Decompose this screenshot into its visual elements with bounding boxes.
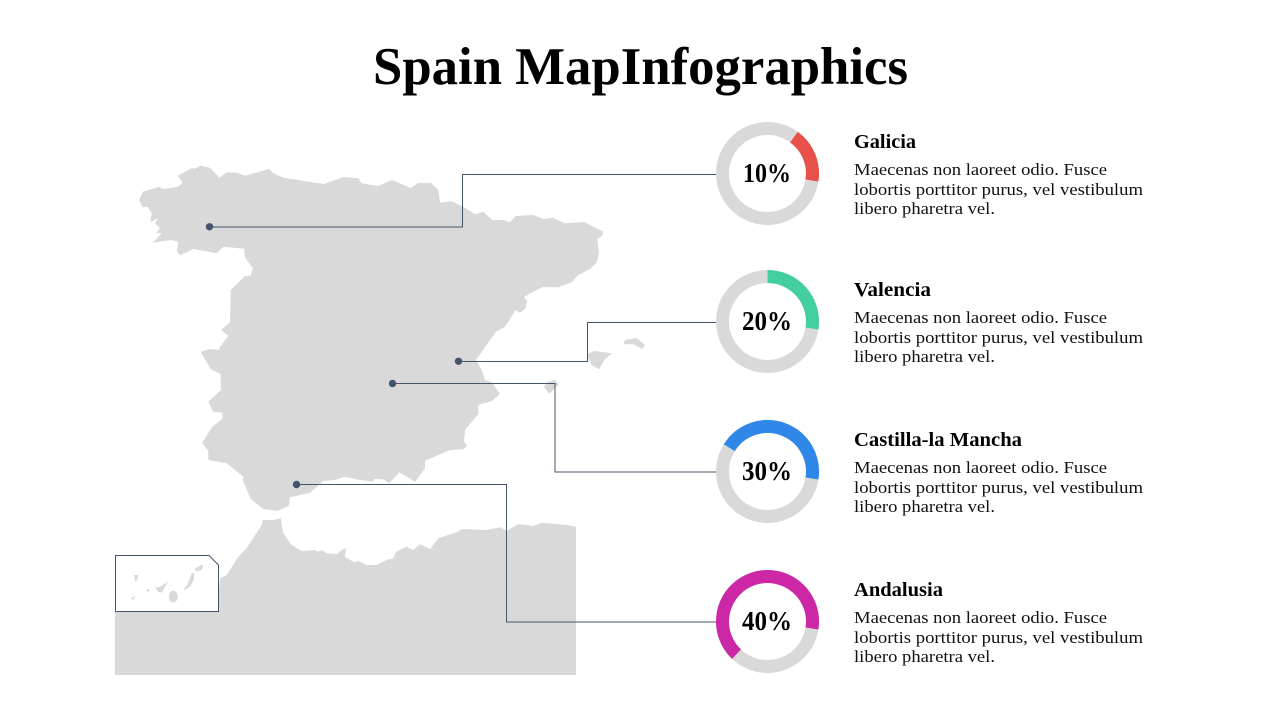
text: Andalusia: Maecenas non laoreet odio. Fusce <box>854 608 1107 627</box>
text: Andalusia: libero pharetra vel. <box>854 647 995 666</box>
Balearic Islands <box>544 338 645 394</box>
title: Spain MapInfographics <box>373 38 908 96</box>
donut: Castilla-la Mancha 30% <box>722 426 813 516</box>
text: Andalusia: Andalusia <box>854 579 943 601</box>
donut: Andalusia 40% <box>722 576 813 666</box>
North Africa landmass <box>115 518 576 675</box>
text: Valencia: lobortis porttitor purus, vel vestibulum <box>854 328 1143 347</box>
donut: Andalusia 40%: 40% <box>742 606 792 636</box>
mainland Spain <box>139 166 603 511</box>
text: Valencia: Valencia <box>854 279 931 301</box>
map of Spain <box>115 166 645 675</box>
donut: Galicia 10%: 10% <box>743 158 791 188</box>
text: Galicia: Galicia <box>854 131 916 153</box>
text: Andalusia <box>854 579 1143 666</box>
donut: Valencia 20%: 20% <box>742 306 792 336</box>
text: Valencia <box>854 279 1143 366</box>
donut: Galicia 10% <box>722 128 813 218</box>
text: Castilla-la Mancha <box>854 429 1143 516</box>
text: Castilla-la Mancha: libero pharetra vel. <box>854 497 995 516</box>
text: Valencia: Maecenas non laoreet odio. Fusce <box>854 308 1107 327</box>
text: Valencia: libero pharetra vel. <box>854 347 995 366</box>
text: Andalusia: lobortis porttitor purus, vel vestibulum <box>854 628 1143 647</box>
text: Galicia: libero pharetra vel. <box>854 199 995 218</box>
connector: Galicia <box>206 174 716 230</box>
text: Galicia: Maecenas non laoreet odio. Fusce <box>854 160 1107 179</box>
text: Castilla-la Mancha: Castilla-la Mancha <box>854 429 1022 451</box>
text: Galicia: lobortis porttitor purus, vel vestibulum <box>854 180 1143 199</box>
connector: Castilla-la Mancha <box>389 380 716 472</box>
donut: Castilla-la Mancha 30%: 30% <box>742 456 792 486</box>
text: Galicia <box>854 131 1143 218</box>
text: Castilla-la Mancha: lobortis porttitor purus, vel vestibulum <box>854 478 1143 497</box>
text: Castilla-la Mancha: Maecenas non laoreet odio. Fusce <box>854 458 1107 477</box>
donut: Valencia 20% <box>722 276 813 366</box>
connector: Valencia <box>455 322 716 365</box>
Canary Islands inset <box>116 556 218 612</box>
connector: Andalusia <box>293 481 716 622</box>
